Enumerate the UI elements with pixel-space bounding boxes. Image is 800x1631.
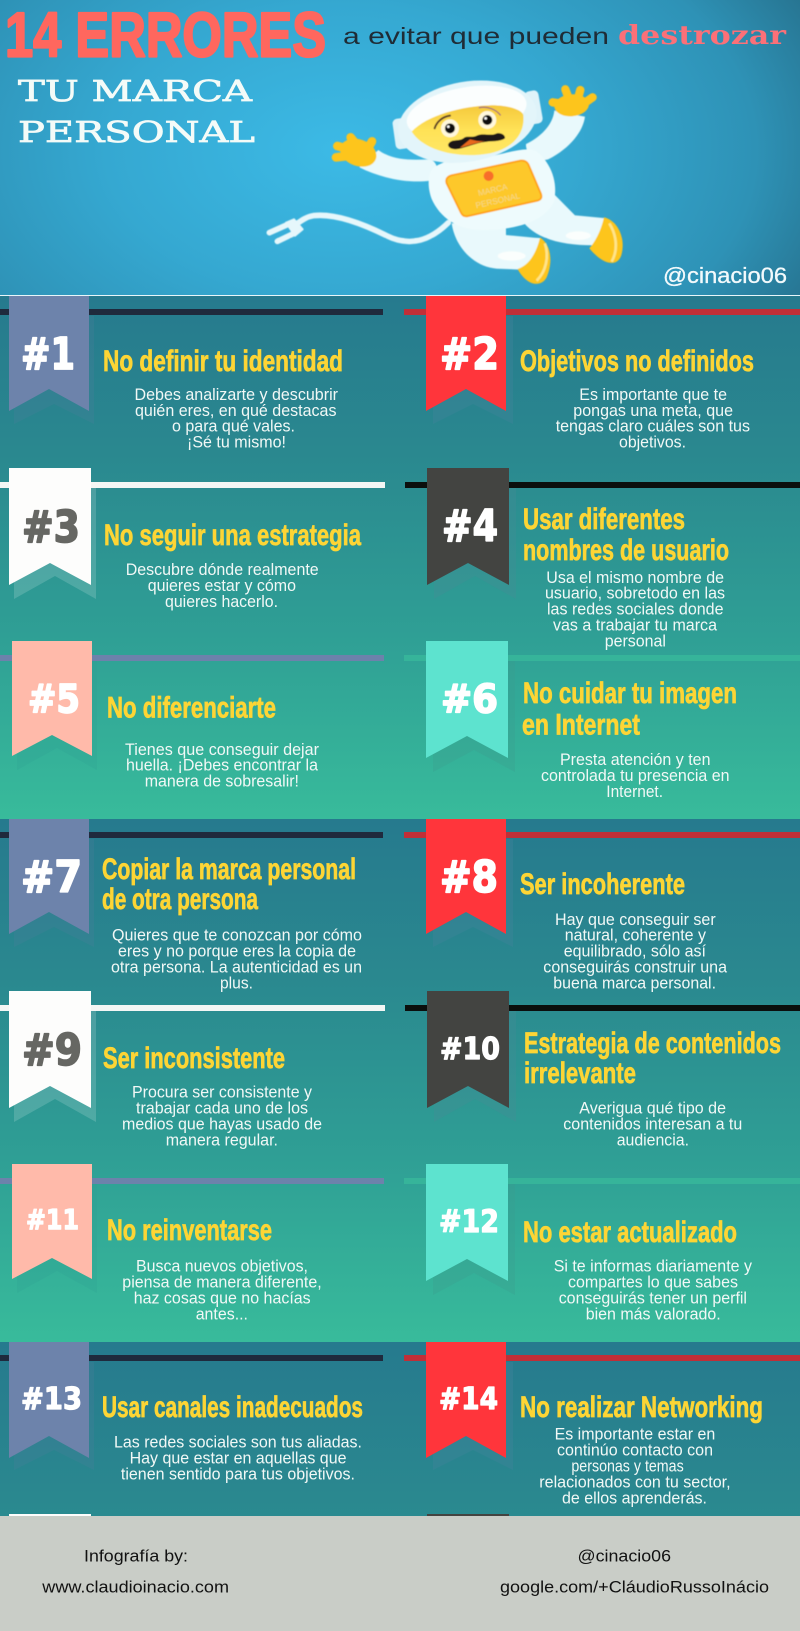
handle: @cinacio06	[663, 263, 787, 288]
error 11: haz cosas que no hacías	[134, 1288, 311, 1307]
error 4: vas a trabajar tu marca	[553, 615, 718, 634]
error 14: #14	[439, 1382, 498, 1417]
error 4	[427, 468, 729, 651]
error 10	[427, 991, 781, 1149]
error 2: pongas una meta, que	[573, 401, 733, 420]
footer contact: @cinacio06	[578, 1548, 671, 1566]
error 14: de ellos aprenderás.	[562, 1489, 707, 1508]
error 8: buena marca personal.	[553, 974, 716, 993]
error 4: usuario, sobretodo en las	[545, 584, 725, 603]
error 13: Hay que estar en aquellas que	[130, 1449, 346, 1468]
error 11: #11	[26, 1203, 79, 1236]
error 13: Las redes sociales son tus aliadas.	[114, 1433, 362, 1452]
heading: tu marca personal	[18, 74, 255, 149]
error 14: Es importante estar en	[555, 1425, 715, 1444]
error 7: Copiar la marca personal	[102, 853, 356, 886]
error 14: continúo contacto con	[557, 1441, 713, 1460]
error 12: #12	[439, 1204, 499, 1240]
error 7: Quieres que te conozcan por cómo	[112, 926, 362, 945]
error 7: de otra persona	[102, 883, 258, 916]
error 11	[12, 1164, 322, 1323]
error 2: tengas claro cuáles son tus	[556, 417, 750, 436]
error 8	[426, 819, 728, 993]
error 7: otra persona. La autenticidad es un	[111, 958, 362, 977]
error 8: Ser incoherente	[520, 868, 685, 901]
error 12	[426, 1164, 752, 1323]
error 10: irrelevante	[524, 1057, 636, 1090]
error 9: medios que hayas usado de	[122, 1114, 322, 1133]
error 1: #1	[21, 329, 75, 380]
error 12: compartes lo que sabes	[568, 1272, 738, 1291]
error 4: personal	[605, 632, 666, 651]
error 9	[9, 991, 322, 1149]
icon: power cable	[269, 215, 448, 241]
error 8: conseguirás construir una	[543, 958, 728, 977]
error 9: Procura ser consistente y	[132, 1082, 312, 1101]
error 10: Averigua qué tipo de	[579, 1098, 726, 1117]
icon: astronaut	[269, 70, 623, 284]
footer panel	[0, 1516, 800, 1631]
error 7: plus.	[220, 974, 253, 993]
title: 14 errores: 14 ERRORES	[5, 0, 326, 70]
error 8: #8	[440, 852, 498, 903]
error 9: Ser inconsistente	[103, 1042, 285, 1075]
error 1: No definir tu identidad	[103, 345, 343, 378]
error 5: huella. ¡Debes encontrar la	[126, 756, 319, 775]
error 10: #10	[440, 1032, 500, 1067]
icon: left glove	[336, 134, 380, 172]
error 6: en Internet	[522, 708, 640, 742]
error 13: tienen sentido para tus objetivos.	[121, 1465, 355, 1484]
subtitle accent: destrozar	[618, 21, 786, 51]
error 3: No seguir una estrategia	[104, 519, 361, 552]
error 6: controlada tu presencia en	[541, 766, 730, 785]
error 5: Tienes que conseguir dejar	[125, 740, 319, 759]
error 12: Si te informas diariamente y	[554, 1256, 752, 1275]
legs and boots	[452, 195, 623, 284]
error 5: manera de sobresalir!	[145, 772, 299, 791]
error 4: #4	[442, 501, 498, 552]
header panel	[0, 0, 800, 296]
error 8: natural, coherente y	[565, 926, 706, 945]
error 10: audiencia.	[617, 1130, 689, 1149]
chest panel	[446, 161, 541, 216]
heading: tu marca personal: TU MARCA	[18, 74, 253, 108]
error 4: Usa el mismo nombre de	[546, 568, 724, 587]
footer credit: www.claudioinacio.com	[41, 1579, 229, 1597]
error 1	[9, 296, 343, 452]
footer credit	[41, 1548, 229, 1597]
error 9: trabajar cada uno de los	[136, 1098, 308, 1117]
error 11: piensa de manera diferente,	[122, 1272, 322, 1291]
error 4: las redes sociales donde	[547, 600, 724, 618]
error 8: Hay que conseguir ser	[555, 910, 716, 929]
error 14: personas y temas	[571, 1457, 684, 1476]
error 3: quieres estar y cómo	[148, 576, 296, 595]
error 11: antes...	[196, 1304, 248, 1323]
error 14	[426, 1342, 763, 1508]
error 10: contenidos interesan a tu	[563, 1114, 742, 1133]
error 13	[9, 1342, 363, 1484]
error 5: No diferenciarte	[107, 692, 276, 725]
error 7: #7	[21, 852, 82, 903]
error 2: objetivos.	[619, 432, 686, 452]
error 3: Descubre dónde realmente	[126, 560, 319, 579]
error 9: #9	[22, 1025, 82, 1076]
error 11: Busca nuevos objetivos,	[136, 1256, 308, 1275]
error 8: equilibrado, sólo así	[564, 942, 706, 961]
panel: errors 7 to 12	[0, 819, 800, 1342]
chest panel: MARCA	[477, 181, 509, 198]
error 3	[9, 468, 361, 611]
error 7	[9, 819, 362, 993]
heading: tu marca personal: PERSONAL	[18, 115, 255, 149]
error 6: Presta atención y ten	[560, 750, 710, 769]
error 13: #13	[21, 1382, 82, 1417]
icon: right glove	[553, 89, 593, 118]
arms	[359, 111, 585, 181]
panel: errors 13 and 14	[0, 1342, 800, 1516]
error 9: manera regular.	[166, 1130, 278, 1149]
error 7: eres y no porque eres la copia de	[118, 942, 356, 961]
panel: errors 1 to 6	[0, 296, 800, 819]
error 6: #6	[441, 678, 498, 723]
error 3: #3	[22, 502, 80, 553]
error 2	[426, 296, 754, 452]
error 1: o para qué vales.	[172, 417, 295, 436]
error 1: quién eres, en qué destacas	[135, 401, 336, 420]
footer contact: google.com/+CláudioRussoInácio	[500, 1579, 769, 1597]
face	[412, 105, 524, 155]
error 6: Internet.	[606, 782, 663, 801]
helmet	[391, 70, 543, 173]
body	[429, 149, 555, 230]
error 11: No reinventarse	[107, 1214, 272, 1247]
error 5: #5	[28, 678, 80, 723]
footer credit: Infografía by:	[84, 1548, 188, 1566]
error 12: bien más valorado.	[586, 1304, 721, 1323]
error 3: quieres hacerlo.	[165, 592, 278, 611]
error 14: relacionados con tu sector,	[539, 1473, 731, 1492]
footer contact	[500, 1548, 769, 1597]
error 6	[426, 641, 737, 801]
error 1: Debes analizarte y descubrir	[134, 385, 338, 404]
error 13: Usar canales inadecuados	[102, 1391, 363, 1424]
error 12: conseguirás tener un perfil	[559, 1288, 747, 1307]
error 2: Es importante que te	[579, 385, 727, 404]
subtitle: a evitar que pueden	[343, 23, 609, 49]
error 5	[12, 641, 319, 791]
chest panel: PERSONAL	[474, 190, 521, 210]
error 2: #2	[440, 329, 499, 380]
error 1: ¡Sé tu mismo!	[187, 432, 286, 452]
error 4: Usar diferentes	[523, 503, 685, 536]
